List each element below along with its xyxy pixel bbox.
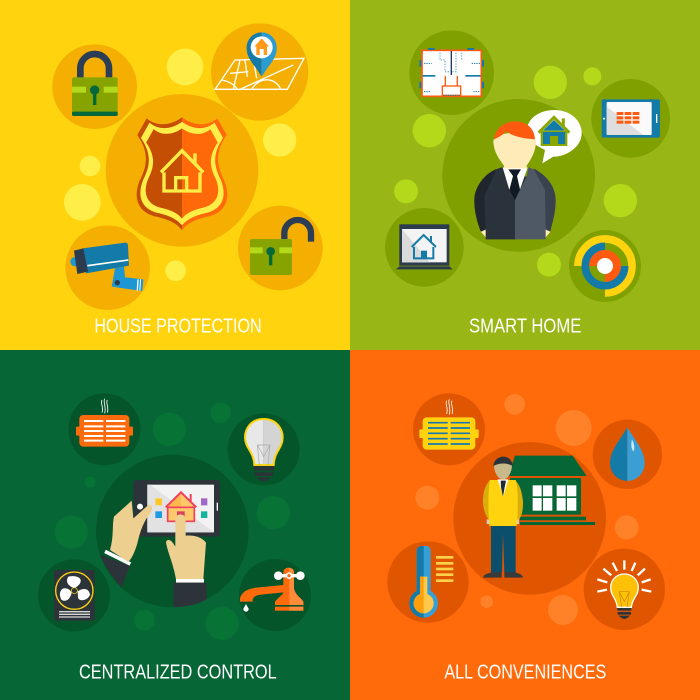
panel: house protection — [0, 0, 350, 350]
icon: light bulb — [245, 419, 283, 481]
icon: open padlock — [250, 220, 311, 275]
panel: centralized control — [0, 350, 350, 700]
icon: fan — [54, 570, 95, 621]
panel: smart home — [350, 0, 700, 350]
icon: orange heater — [76, 399, 133, 447]
icon: yellow heater — [419, 399, 479, 450]
icon: map with location pin — [215, 32, 304, 89]
tablet held by hands — [100, 480, 220, 607]
heading: smart home: SMART HOME — [469, 315, 581, 337]
icon: water tap — [240, 568, 305, 612]
house behind the man — [508, 456, 595, 525]
icon: security camera — [70, 243, 143, 291]
heading: centralized control: CENTRALIZED CONTROL — [79, 661, 277, 683]
heading: all conveniences: ALL CONVENIENCES — [444, 661, 606, 683]
left hand — [100, 501, 152, 587]
icon: circular chart — [578, 239, 632, 293]
icon: thermometer — [409, 546, 453, 618]
icon: water drop — [610, 427, 645, 481]
heading: house protection: HOUSE PROTECTION — [94, 315, 262, 337]
panel: all conveniences — [350, 350, 700, 700]
icon: shield with house — [137, 117, 227, 230]
icon: closed padlock — [72, 54, 118, 116]
speech bubble with house — [527, 110, 582, 163]
right hand — [166, 514, 207, 607]
icon: glowing bulb — [597, 560, 651, 619]
figure: man in yellow vest — [483, 457, 523, 578]
icon: tablet — [602, 99, 660, 138]
icon: laptop — [396, 224, 453, 269]
figure: man in suit — [474, 121, 556, 239]
icon: floor plan — [419, 48, 484, 96]
